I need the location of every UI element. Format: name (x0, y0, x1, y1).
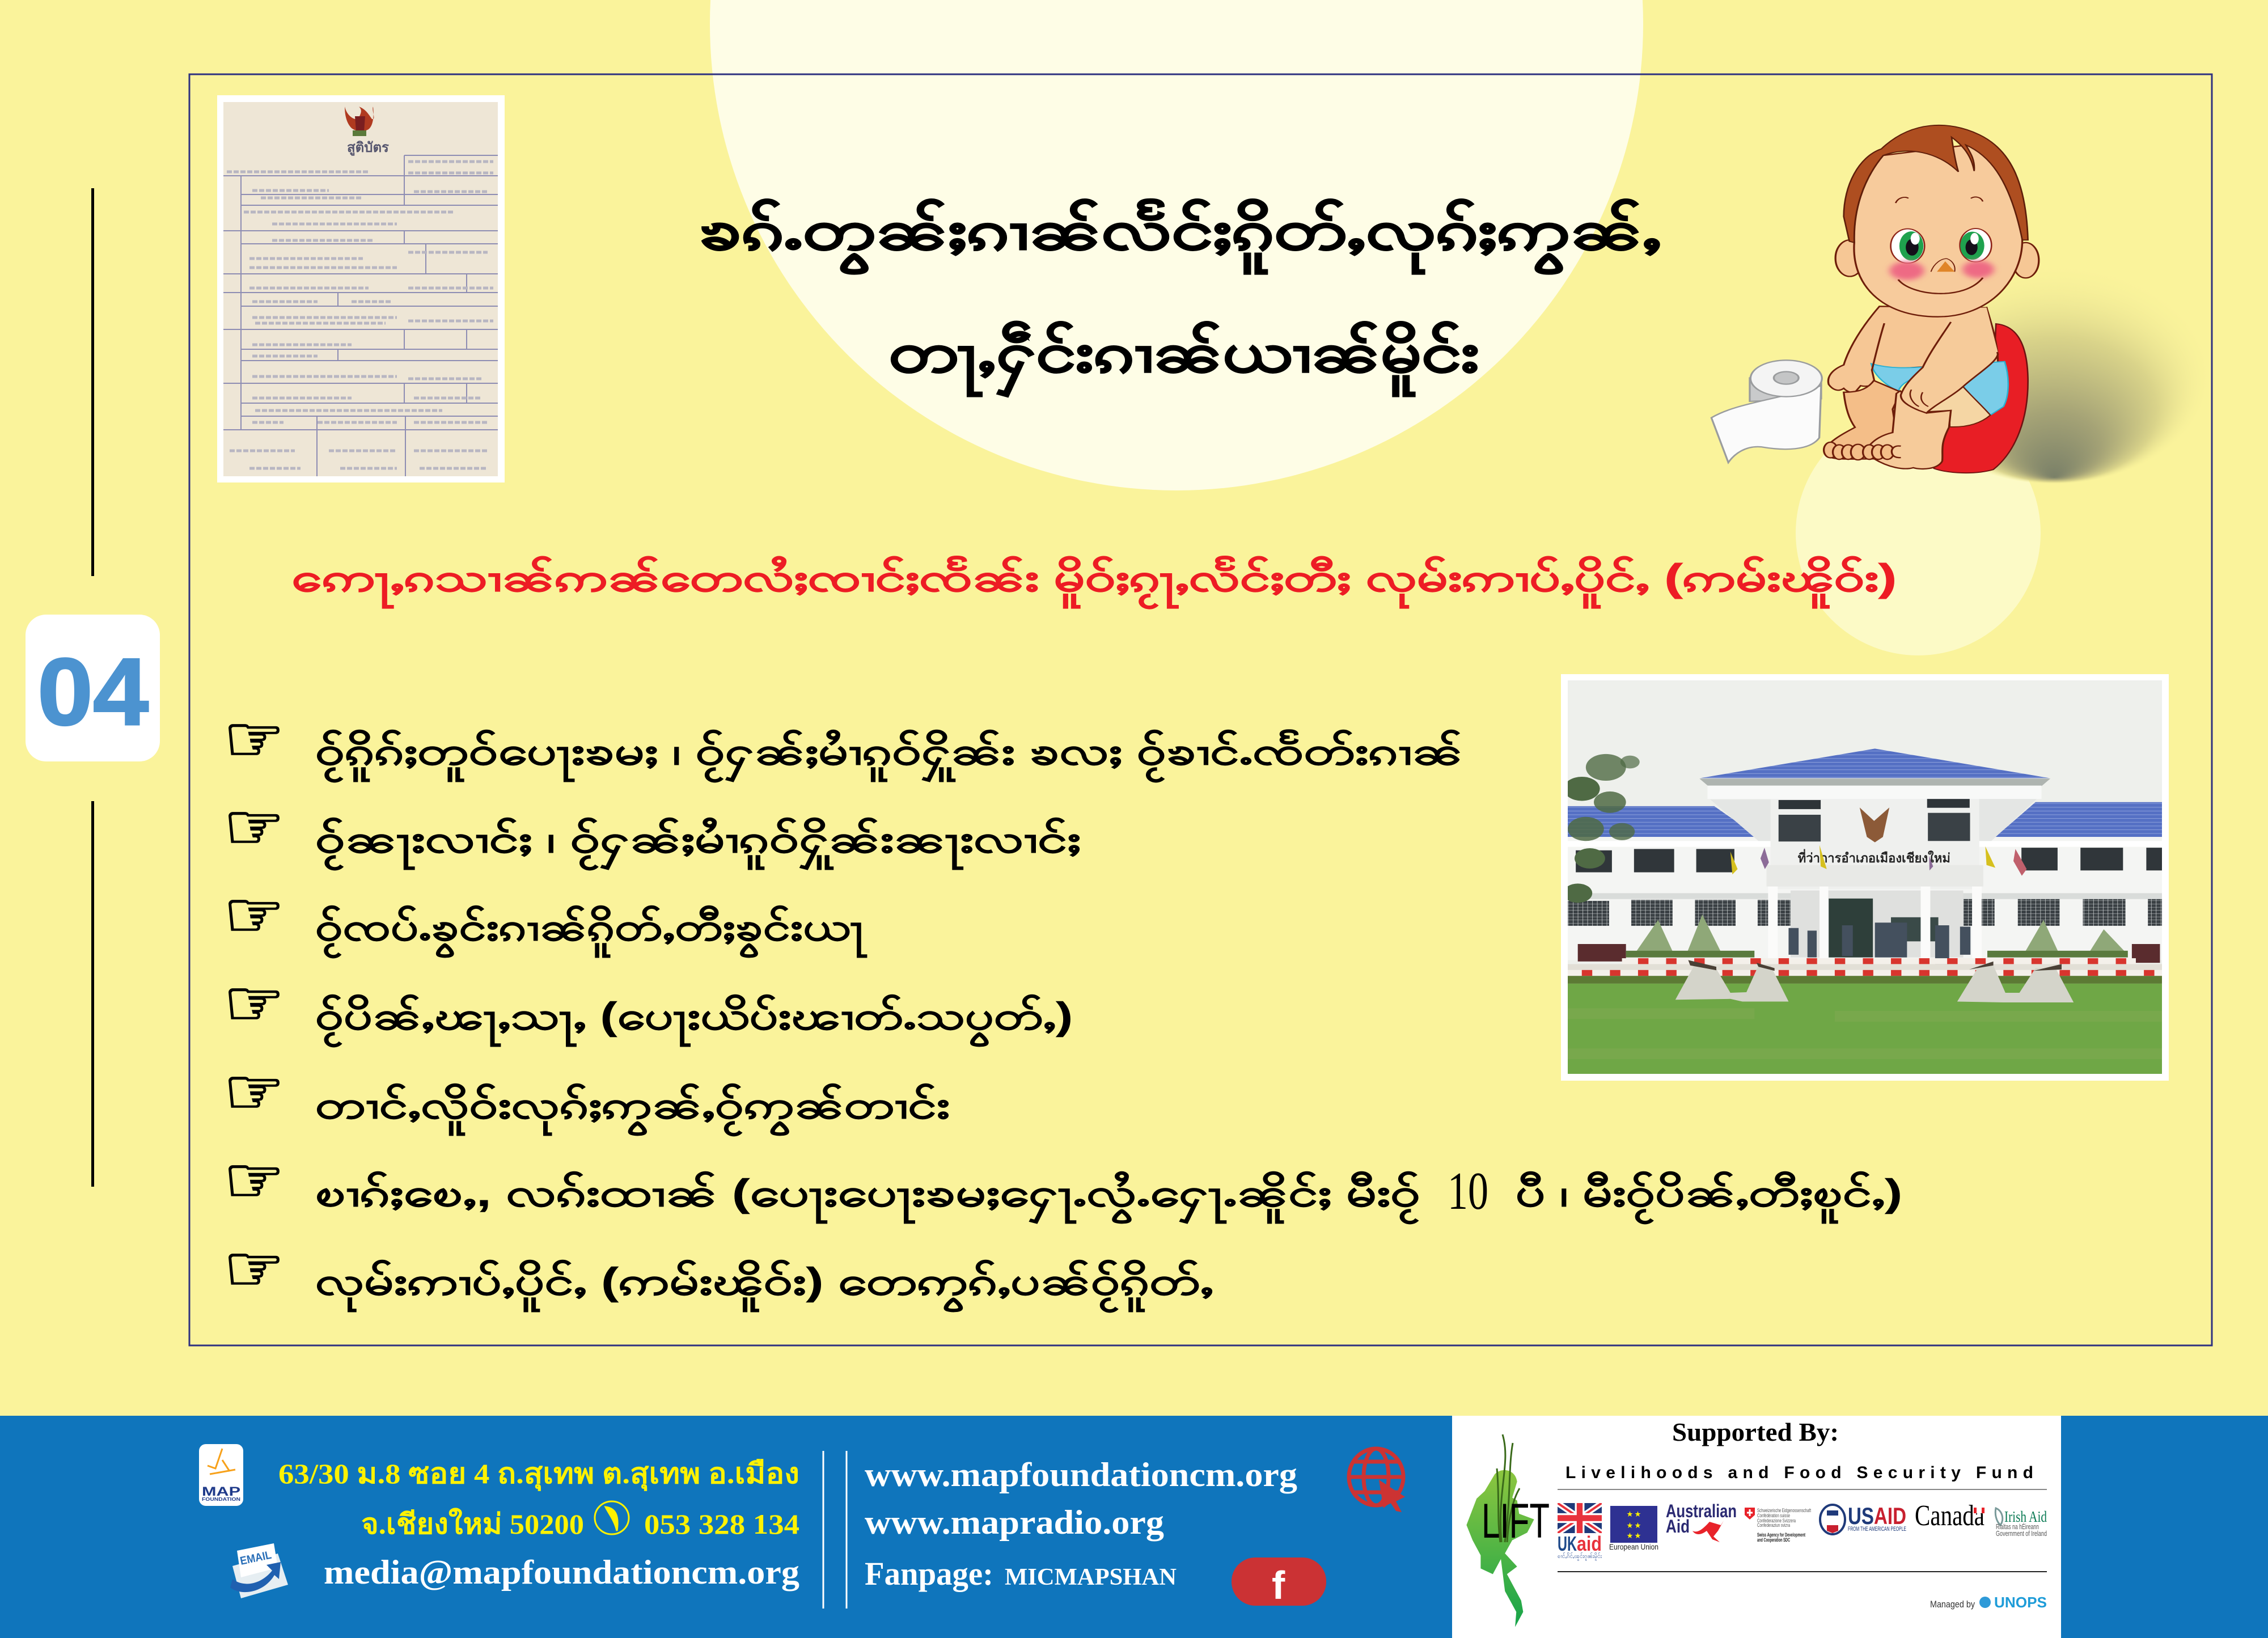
item 5: တၢင်ႇလိူဝ်းလုၵ်ႈဢွၼ်ႇဝႂ်ဢွၼ်တၢင်း (315, 1083, 950, 1137)
district office photo (1561, 674, 2169, 1081)
item 1 (223, 702, 1463, 783)
UK aid logo: UK (1558, 1532, 1577, 1555)
item 4: ☞ (223, 967, 285, 1040)
shadow (1897, 261, 2212, 484)
item 1: ဝႂ်ၵိူၵ်ႈတူဝ်ပေႃးၶမႈ ၊ ဝႂ်ႁၼ်ႈမၢႆၵူဝ်ႁိူၼ်း ၶလႈ ဝႂ်ၶၢင်ႉၸႅတ်းၵၢၼ် (315, 729, 1463, 783)
item 3 (223, 878, 867, 959)
fanpage: MICMAPSHAN (1005, 1564, 1177, 1590)
footer dividers (823, 1451, 847, 1609)
Irish Aid logo: Irish Aid (2004, 1508, 2047, 1525)
USAID logo (1820, 1502, 1906, 1534)
icon: email: EMAIL (239, 1549, 273, 1568)
USAID logo: FROM THE AMERICAN PEOPLE (1848, 1526, 1906, 1533)
decorative pale circle behind baby (1796, 410, 2041, 655)
item 6: ☞ (223, 1144, 285, 1217)
item 2: ☞ (223, 790, 285, 864)
UK aid logo: ၿၢင်ႇၵိင်ႇၽွင်းၵူၼ်းမိူင်း (1558, 1552, 1602, 1561)
EU logo (1609, 1506, 1658, 1551)
birth certificate image (217, 95, 505, 482)
central block (1771, 798, 1979, 889)
email address: media@mapfoundationcm.org (324, 1554, 799, 1591)
toilet paper roll (1711, 360, 1822, 463)
Canada logo: Canada (1915, 1500, 1984, 1532)
title line 1: ၶၵ်ႉတွၼ်ႈၵၢၼ်လႅင်ႈၵိူတ်ႇလုၵ်ႈဢွၼ်ႇ (699, 198, 1661, 274)
address line 2: จ.เชียงใหม่ 50200 (361, 1508, 584, 1540)
garuda on facade (1860, 807, 1889, 843)
Irish Aid logo: Rialtas na hÉireann (1996, 1522, 2039, 1531)
Swiss agency logo: Schweizerische Eidgenossenschaft (1757, 1508, 1811, 1513)
UNOPS credit: Managed by (1930, 1599, 1975, 1610)
decorative pale circle behind title (710, 0, 1643, 490)
item 6: ၿၢၵ်ႈၿေႇ, လၵ်းထၢၼ် (ပေႃးပေႃးၶမႈႁေႃႉလွႆႉႁေႃႉၼိူင်ႈ မီးဝႂ် (315, 1171, 1420, 1225)
MAP foundation logo: MAP (202, 1484, 240, 1499)
hair (1844, 125, 2028, 243)
USAID logo: AID (1874, 1502, 1906, 1529)
fanpage (865, 1555, 1177, 1592)
certificate form lines (223, 155, 498, 476)
certificate heading: สูติบัตร (347, 141, 389, 156)
footer bar (0, 1416, 2268, 1638)
Irish Aid logo (1995, 1508, 2047, 1538)
icon: facebook (1232, 1557, 1326, 1607)
EU logo: ★ ★ (1627, 1522, 1641, 1529)
cheeks (1890, 261, 1994, 280)
eyebrows (1895, 197, 1983, 203)
cannon plinths (1675, 966, 1788, 1002)
Australian Aid logo: Aid (1666, 1516, 1690, 1537)
central roof (1700, 748, 2050, 778)
lower grilled windows (1568, 899, 2162, 926)
item 6 (223, 1144, 1902, 1225)
Australian Aid logo (1666, 1501, 1737, 1542)
item 6: ပီ ၊ မီးဝႂ်ပိၼ်ႇတီႈၿူင်ႇ) (1516, 1171, 1902, 1225)
item 1: ☞ (223, 702, 285, 776)
rules (1558, 1489, 2047, 1490)
shrubs (1634, 915, 2128, 955)
item 5: ☞ (223, 1055, 285, 1129)
Swiss agency logo: Confederaziun svizra (1757, 1522, 1790, 1528)
back leg and toes (1825, 380, 1900, 459)
red subtitle: ဢေႃႇၵသၢၼ်ဢၼ်တေလႆႈၸၢင်ႈၸႅၼ်း မိူဝ်ႈၵႂႃႇလႅင်ႈတီႈ လုမ်းဢၢပ်ႇပိူင်ႇ (ဢမ်းၽိူဝ်း) (291, 555, 1897, 610)
Swiss agency logo: Confédération suisse (1757, 1513, 1790, 1518)
UNOPS credit: UNOPS (1994, 1594, 2047, 1611)
toes (1824, 442, 1901, 460)
title line 2: တႃႇႁဵင်းၵၢၼ်ယၢၼ်မိူင်း (888, 321, 1479, 397)
roofs (1568, 806, 1758, 837)
Swiss agency logo (1745, 1508, 1811, 1543)
front arm and hand (1901, 308, 1998, 413)
Swiss agency logo: Swiss Agency for Development (1757, 1532, 1805, 1538)
step number badge (26, 615, 160, 761)
baby on potty illustration (1711, 125, 2212, 484)
item 5 (223, 1055, 950, 1137)
fanpage: Fanpage: (865, 1555, 993, 1592)
entrance (1791, 891, 1963, 958)
icon: globe (1349, 1449, 1405, 1512)
UK aid logo: aid (1577, 1532, 1602, 1555)
MAP foundation logo (199, 1444, 243, 1506)
item 6: 10 (1448, 1162, 1488, 1221)
item 7 (223, 1232, 1213, 1313)
Swiss agency logo: Confederazione Svizzera (1757, 1518, 1796, 1523)
Australian Aid logo: Australian (1666, 1501, 1737, 1521)
content frame (189, 74, 2212, 1345)
balcony (1767, 865, 1983, 887)
wings (1568, 837, 2162, 960)
side rule bottom (91, 801, 94, 1187)
EU logo: European Union (1609, 1542, 1658, 1551)
LIFT logo (1466, 1434, 1550, 1627)
Irish Aid logo: Government of Ireland (1996, 1529, 2047, 1538)
step number badge: 04 (37, 638, 149, 745)
item 3: ☞ (223, 878, 285, 952)
item 4: ဝႂ်ပိၼ်ႇၽႃႇသႃႇ (ပေႃးယိပ်းၽၢတ်ႉသပွတ်ႇ) (315, 994, 1073, 1048)
nose (1931, 259, 1955, 272)
front leg (1869, 391, 1951, 469)
icon: email (230, 1543, 288, 1598)
lawn (1568, 984, 2162, 1074)
fund name: Livelihoods and Food Security Fund (1565, 1463, 2033, 1482)
website 2: www.mapradio.org (865, 1504, 1164, 1541)
checklist (223, 702, 1902, 1313)
phone number: 053 328 134 (644, 1508, 799, 1540)
curb (1622, 958, 2136, 964)
eyes (1891, 228, 1991, 263)
supported by heading: Supported By: (1672, 1417, 1839, 1446)
potty (1934, 324, 2028, 473)
website 1: www.mapfoundationcm.org (865, 1456, 1297, 1493)
flags (1730, 845, 1995, 874)
ears (1835, 240, 1864, 277)
UNOPS credit (1930, 1594, 2047, 1611)
UK aid logo (1558, 1503, 1602, 1561)
item 2 (223, 790, 1081, 871)
EU logo: ★ ★ (1627, 1533, 1641, 1539)
MAP foundation logo: FOUNDATION (202, 1497, 240, 1502)
EU logo: ★ ★ (1627, 1511, 1641, 1518)
title (699, 198, 1661, 397)
icon: facebook: f (1272, 1563, 1285, 1607)
item 4 (223, 967, 1073, 1048)
icon: phone (595, 1501, 629, 1534)
pillars (1768, 887, 1982, 966)
Swiss agency logo: and Cooperation SDC (1757, 1537, 1790, 1543)
supporters panel (1452, 1416, 2061, 1638)
people and motorcycles (1578, 944, 2160, 963)
garuda emblem (345, 107, 374, 136)
sign on building: ที่ว่าการอำเภอเมืองเชียงใหม่ (1798, 849, 1950, 866)
thigh (1927, 386, 1990, 427)
item 3: ဝႂ်ၸပ်ႉၶွင်းၵၢၼ်ၵိူတ်ႇတီႈၶွင်းယႃ (315, 905, 867, 959)
address (278, 1458, 799, 1540)
far arm and torso (1828, 306, 1998, 393)
smile (1898, 278, 1983, 294)
tree (1563, 754, 1640, 903)
item 2: ဝႂ်ၼႃးလၢင်ႈ ၊ ဝႂ်ႁၼ်ႈမၢႆၵူဝ်ႁိူၼ်းၼႃးလၢင်ႈ (315, 817, 1081, 871)
side rule top (91, 188, 94, 576)
item 7: ☞ (223, 1232, 285, 1306)
face (1854, 145, 2022, 317)
USAID logo: US (1848, 1502, 1874, 1529)
certificate fake writing (227, 162, 493, 468)
item 7: လုမ်းဢၢပ်ႇပိူင်ႇ (ဢမ်းၽိူဝ်း) တေဢွၵ်ႇပၼ်ဝႂ်ၵိူတ်ႇ (315, 1259, 1213, 1313)
diaper (1871, 362, 2008, 415)
upper windows (1576, 848, 2162, 873)
address line 1: 63/30 ม.8 ซอย 4 ถ.สุเทพ ต.สุเทพ อ.เมือง (278, 1458, 799, 1491)
LIFT logo: LIFT (1482, 1494, 1550, 1548)
